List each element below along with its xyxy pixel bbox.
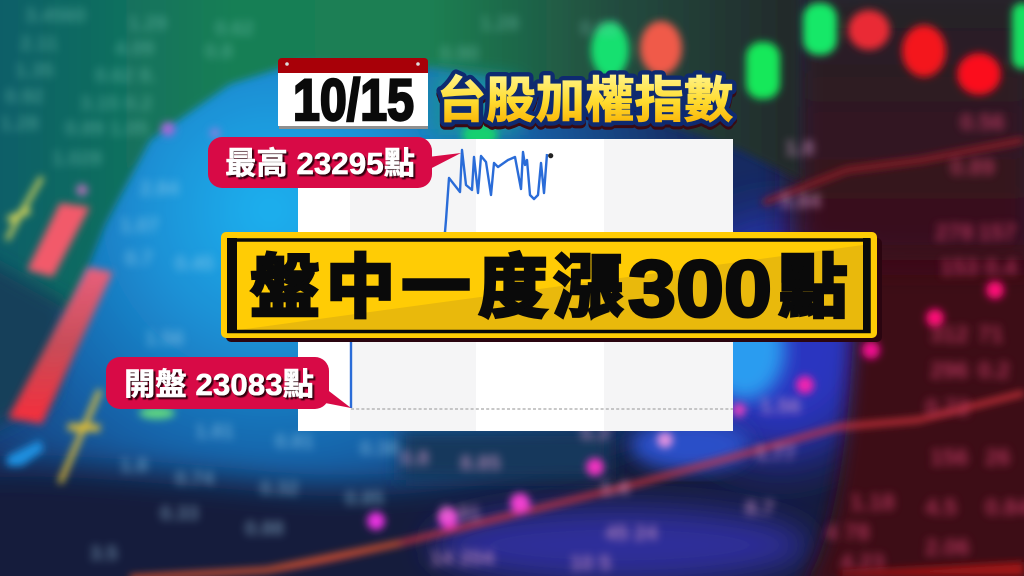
- blurred stock-market background: 0.38: [360, 438, 399, 460]
- blurred stock-market background: 1.028: [52, 148, 102, 170]
- blurred stock-market background: 0.91: [440, 502, 481, 525]
- blurred stock-market background: 0.92: [5, 86, 44, 108]
- blurred stock-market background: 2.06: [925, 534, 970, 560]
- blurred stock-market background: 153: [940, 254, 978, 280]
- callout: open: [106, 357, 351, 409]
- date calendar badge: [278, 58, 428, 133]
- blurred stock-market background: 0.4: [985, 254, 1017, 280]
- blurred stock-market background: 5.3: [580, 422, 609, 445]
- blurred stock-market background: 0.56: [960, 109, 1005, 135]
- blurred stock-market background: 3.5: [90, 543, 118, 565]
- blurred stock-market background: 0.62 8.: [95, 65, 156, 87]
- blurred stock-market background: 0.74: [175, 468, 215, 490]
- blurred stock-market background: 26: [985, 444, 1011, 470]
- blurred stock-market background: 4.5: [925, 494, 957, 520]
- banner frame: [229, 240, 869, 332]
- blurred stock-market background: 1.56: [145, 328, 184, 350]
- blurred stock-market background: 0.62: [215, 18, 254, 40]
- blurred stock-market background: 1.81: [195, 421, 234, 443]
- blurred stock-market background: 0.2: [978, 357, 1010, 383]
- heading: 台股加權指數: 台股加權指數: [437, 74, 733, 128]
- blurred stock-market background: 0.89 1.05: [65, 118, 148, 140]
- banner body: [221, 232, 877, 338]
- blurred stock-market background: 0.85: [345, 488, 384, 510]
- panel: intraday line chart: [298, 139, 733, 431]
- blurred stock-market background: 1.07: [120, 215, 159, 237]
- blurred stock-market background: 312: [930, 321, 968, 347]
- blurred stock-market background: 0.33: [160, 503, 199, 525]
- blurred stock-market background: 14 204: [430, 547, 495, 570]
- heading: 台股加權指數: 台股加權指數: [437, 77, 733, 131]
- blurred stock-market background: 0.81: [275, 431, 314, 453]
- blurred stock-market background: 0.72: [925, 394, 970, 420]
- blurred stock-market background: 1.56: [760, 395, 801, 418]
- blurred stock-market background: 1.29: [128, 13, 167, 35]
- banner text: Chinese characters: 漲: [554, 249, 622, 326]
- blurred stock-market background: 1.28: [0, 113, 39, 135]
- blurred stock-market background: 0.84: [780, 190, 821, 213]
- blurred stock-market background: 2.84: [140, 178, 180, 200]
- opening baseline: [351, 408, 733, 410]
- blurred stock-market background: 0.62: [580, 18, 619, 40]
- blurred stock-market background: 10 5: [570, 552, 611, 575]
- blurred stock-market background: 3.4560: [25, 5, 86, 27]
- headline banner: [221, 232, 882, 342]
- blurred stock-market background: 0.32: [260, 478, 299, 500]
- blurred stock-market background: 1.77: [755, 442, 796, 465]
- blurred stock-market background: 2.11: [20, 33, 58, 55]
- banner text: Chinese characters: 度: [478, 249, 548, 326]
- blurred stock-market background: 4 78: [825, 519, 870, 545]
- blurred stock-market background: 1.8: [785, 137, 815, 160]
- blurred stock-market background: 4.23: [840, 549, 885, 575]
- banner text: Chinese characters: 盤: [250, 249, 320, 326]
- callout: day high: [208, 137, 461, 188]
- blurred stock-market background: 1.8: [120, 455, 148, 477]
- heading: 台股加權指數: 台股加權指數: [437, 74, 733, 128]
- blurred stock-market background: 0.7: [125, 248, 153, 270]
- blurred stock-market background: 45 24: [605, 522, 658, 545]
- blurred stock-market background: 0.90: [440, 43, 479, 65]
- last price dot: [548, 153, 553, 158]
- blurred stock-market background: 0.88: [245, 518, 284, 540]
- calendar header: [278, 58, 428, 73]
- callout: open: 開盤 23083點: [124, 367, 314, 402]
- blurred stock-market background: 1.18: [850, 489, 895, 515]
- blurred stock-market background: 0.8: [205, 41, 233, 63]
- blurred stock-market background: 0.89: [950, 154, 995, 180]
- blurred stock-market background: 4.09: [115, 38, 154, 60]
- banner text: Chinese characters: 點: [778, 249, 848, 326]
- blue index line: [351, 150, 547, 408]
- banner text: number: 300: [628, 244, 772, 333]
- blurred stock-market background: 8.7: [745, 497, 774, 520]
- blurred stock-market background: 157: [978, 219, 1016, 245]
- blurred stock-market background: 8.85: [460, 452, 501, 475]
- blurred stock-market background: 278: [935, 219, 974, 245]
- banner text: Chinese characters: 一: [402, 249, 470, 326]
- blurred stock-market background: 0.8: [400, 447, 430, 470]
- date: 10/15: [293, 68, 414, 133]
- blurred stock-market background: 156: [930, 444, 968, 470]
- blurred stock-market background: 71: [978, 321, 1004, 347]
- blurred stock-market background: 0.45: [175, 253, 214, 275]
- blurred stock-market background: 1.28: [480, 13, 519, 35]
- blurred stock-market background: 3.15 0.2: [80, 93, 152, 115]
- callout: day high: 最高 23295點: [225, 146, 415, 181]
- blurred stock-market background: 1.4: [600, 477, 630, 500]
- banner shadow: [226, 238, 882, 342]
- banner text: Chinese characters: 中: [326, 249, 395, 326]
- blurred stock-market background: 1.35: [15, 60, 54, 82]
- blurred stock-market background: 296: [930, 357, 968, 383]
